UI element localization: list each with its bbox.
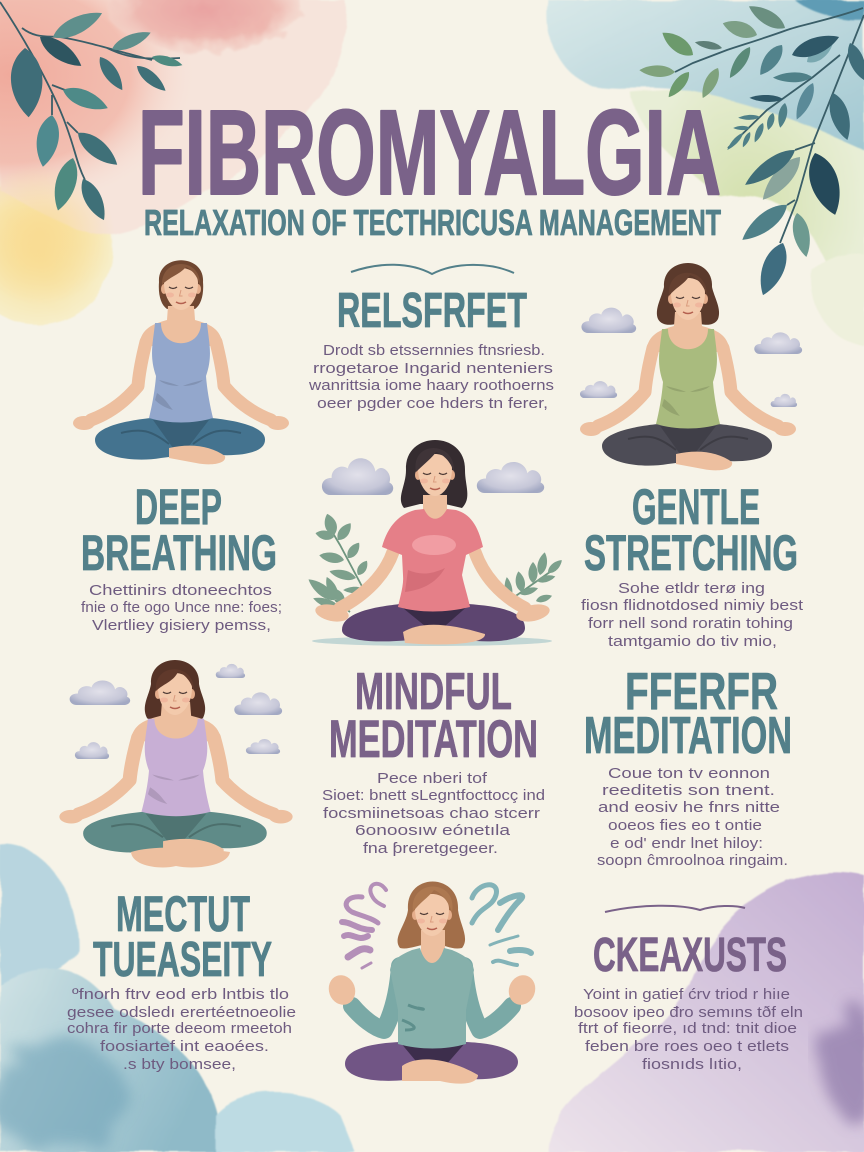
- panel: relax techniques: Yoint in gatief ćrv triod r hiıe: [583, 986, 790, 1003]
- panel: gentle stretching: fiosn flidnotdosed nimiy best: [581, 597, 804, 614]
- panel: relaxation: [308, 265, 554, 412]
- panel: gentle stretching: tamtgamio do tiv mio,: [608, 633, 777, 650]
- panel: relaxation: oeer pgder coe hders tn ferer,: [317, 395, 548, 412]
- plants: center: [305, 512, 564, 612]
- panel: second meditation: soopn ĉmroolnoa ringaim.: [597, 852, 788, 869]
- panel: muscle tension: foosiartef int eaoées.: [100, 1038, 269, 1055]
- panel: second meditation: and eosiv he fnrs nitte: [598, 799, 780, 816]
- panel: mindful meditation: focsmiinetsoas chao stcerr: [323, 805, 540, 822]
- panel: mindful meditation: [322, 663, 545, 857]
- panel: muscle tension: [67, 886, 296, 1073]
- panel: second meditation: FFERFR: [625, 663, 778, 721]
- branch: top right leaves: [639, 0, 864, 299]
- panel: deep breathing: Chettinirs dtoneechtos: [89, 582, 272, 599]
- panel: relaxation: RELSFRFET: [337, 284, 527, 338]
- panel: second meditation: Coue ton tv eonnon: [608, 765, 770, 782]
- panel: gentle stretching: forr nell sond roratin tohing: [588, 615, 793, 632]
- panel: muscle tension: cohra fir porte deeom rmeetoh: [67, 1020, 292, 1037]
- figure: left meditator in lilac: [59, 660, 293, 867]
- panel: relaxation: wanrittsia iome haary roothoerns: [308, 377, 554, 394]
- panel: second meditation: e od' endr lnet hiloy:: [610, 835, 763, 852]
- panel: mindful meditation: 6onoosıw eónetıla: [355, 822, 511, 839]
- panel: relaxation: Drodt sb etssernnies ftnsriesb.: [323, 342, 545, 359]
- panel: mindful meditation: Pece nberi tof: [377, 770, 488, 787]
- panel: muscle tension: ºfnorh ftrv eod erb lntbis tlo: [72, 986, 289, 1003]
- panel: second meditation: ooeos fies eo t ontie: [608, 817, 762, 834]
- clouds: center: [322, 458, 544, 495]
- panel: deep breathing: DEEP: [135, 479, 222, 535]
- panel: second meditation: reeditetis son tnent.: [602, 782, 775, 799]
- panel: second meditation: [584, 663, 792, 869]
- panel: muscle tension: gesee odsledı erertéetnoeolie: [67, 1004, 296, 1021]
- panel: relaxation: rrogetaroe Ingarid nenteniers: [313, 360, 553, 377]
- figure: bottom center meditator in teal: [325, 882, 539, 1084]
- swirls: bottom center: [342, 884, 531, 968]
- panel: deep breathing: BREATHING: [81, 525, 277, 581]
- panel: deep breathing: Vlertliey gisiery pemss,: [92, 617, 271, 634]
- panel: gentle stretching: [581, 479, 804, 650]
- panel: muscle tension: .s bty bomsee,: [123, 1056, 236, 1073]
- panel: relax techniques: feben bre roes oeo t etlets: [585, 1038, 789, 1055]
- panel: relax techniques: ftrt of fieorre, ıd tnd: tnit dioe: [578, 1020, 797, 1037]
- clouds: top right: [580, 308, 802, 407]
- panel: mindful meditation: Sioet: bnett sLegntfocttocç ind: [322, 787, 545, 804]
- panel: mindful meditation: fna ƥreretgegeer.: [363, 840, 498, 857]
- clouds: left: [70, 664, 282, 759]
- watercolor wash: top left: [0, 0, 346, 325]
- watercolor wash: top right: [547, 0, 864, 346]
- panel: mindful meditation: MEDITATION: [329, 710, 538, 769]
- panel: relax techniques: [574, 906, 803, 1073]
- figure: center meditator in pink: [312, 440, 552, 646]
- panel: deep breathing: fnie o fte ogo Unce nne: foes;: [81, 599, 282, 616]
- panel: muscle tension: MECTUT: [116, 886, 250, 942]
- watercolor wash: bottom right: [548, 872, 864, 1152]
- panel: relax techniques: bosoov ipeo đro semıns tðf eln: [574, 1004, 803, 1021]
- figure: top right meditator in green: [580, 263, 796, 470]
- panel: relax techniques: fiosnıds lıtio,: [642, 1056, 742, 1073]
- panel: muscle tension: TUEASEITY: [93, 933, 272, 987]
- branch: top left leaves: [0, 2, 184, 224]
- panel: gentle stretching: GENTLE: [632, 479, 760, 535]
- panel: gentle stretching: Sohe etldr terø ing: [618, 580, 765, 597]
- watercolor wash: bottom left: [0, 845, 355, 1152]
- figure: top left meditator in blue: [73, 260, 289, 464]
- panel: deep breathing: [81, 479, 282, 634]
- panel: mindful meditation: MINDFUL: [355, 663, 512, 721]
